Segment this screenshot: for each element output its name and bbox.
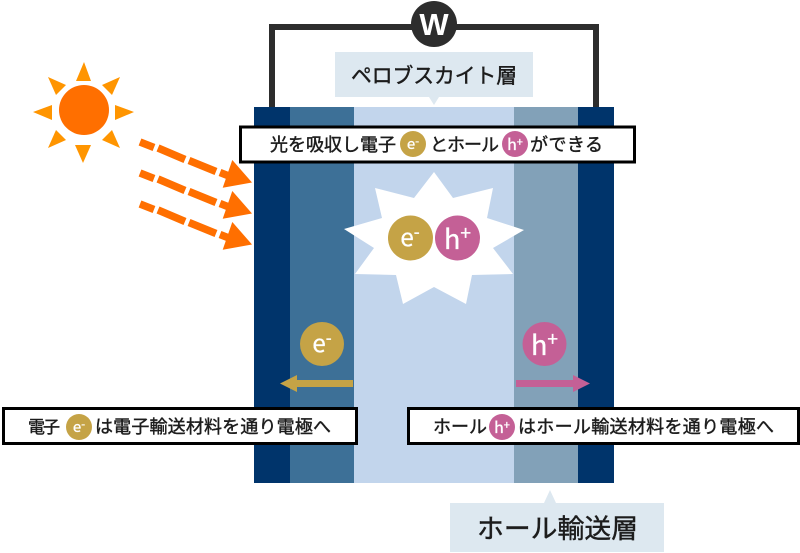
callout: hole path: はホール輸送材料を通り電極へ (518, 417, 774, 437)
icon: electron badge (400, 131, 426, 157)
icon: hole badge (502, 131, 528, 157)
callout: electron path (4, 408, 356, 444)
icon: hole badge: + (504, 417, 510, 433)
callout: light absorption: 光を吸収し電子 (270, 135, 396, 155)
icon: electron moving left: - (326, 324, 332, 349)
icon: hole: h (444, 218, 460, 257)
callout: hole transport layer: ホール輸送層 (477, 514, 638, 544)
icon: hole badge (489, 414, 515, 440)
callout: electron path: 電子 (28, 418, 60, 437)
icon: electron moving left: e (312, 324, 326, 359)
callout: perovskite layer: ペロブスカイト層 (351, 64, 517, 88)
icon: electron: e (400, 218, 414, 253)
icon: electron badge: e (407, 133, 415, 154)
callout: light absorption: とホール (430, 135, 499, 155)
icon: hole moving right: h (531, 324, 547, 363)
icon: electron badge (66, 414, 92, 440)
icon: electron badge: e (73, 416, 81, 437)
panel: solar cell layers (254, 107, 614, 483)
callout: light absorption (240, 127, 634, 162)
callout: electron path: は電子輸送材料を通り電極へ (95, 417, 331, 437)
arrows: sunlight rays (140, 142, 252, 250)
external circuit with wattmeter (272, 1, 596, 108)
icon: hole badge: + (517, 134, 523, 150)
icon: hole moving right (522, 322, 566, 366)
icon: hole badge: h (507, 131, 517, 155)
external circuit with wattmeter: W (419, 7, 449, 42)
icon: hole: + (460, 219, 471, 246)
icon: electron moving left (300, 322, 344, 366)
callout: hole transport layer (450, 490, 664, 552)
icon: electron: - (414, 218, 420, 243)
arrow: electron direction (280, 375, 353, 392)
icon: electron (388, 216, 433, 260)
callout: hole path: ホール (433, 417, 487, 437)
callout: perovskite layer (335, 52, 533, 105)
icon: sun (33, 62, 134, 163)
burst: electron-hole pair generation (344, 172, 524, 304)
callout: light absorption: ができる (530, 135, 603, 155)
icon: hole badge: h (494, 414, 504, 438)
arrow: hole direction (516, 375, 590, 392)
icon: hole moving right: + (547, 325, 558, 352)
icon: electron badge: - (81, 416, 85, 432)
icon: hole (435, 216, 480, 260)
callout: hole path (408, 408, 798, 444)
icon: electron badge: - (415, 133, 419, 149)
